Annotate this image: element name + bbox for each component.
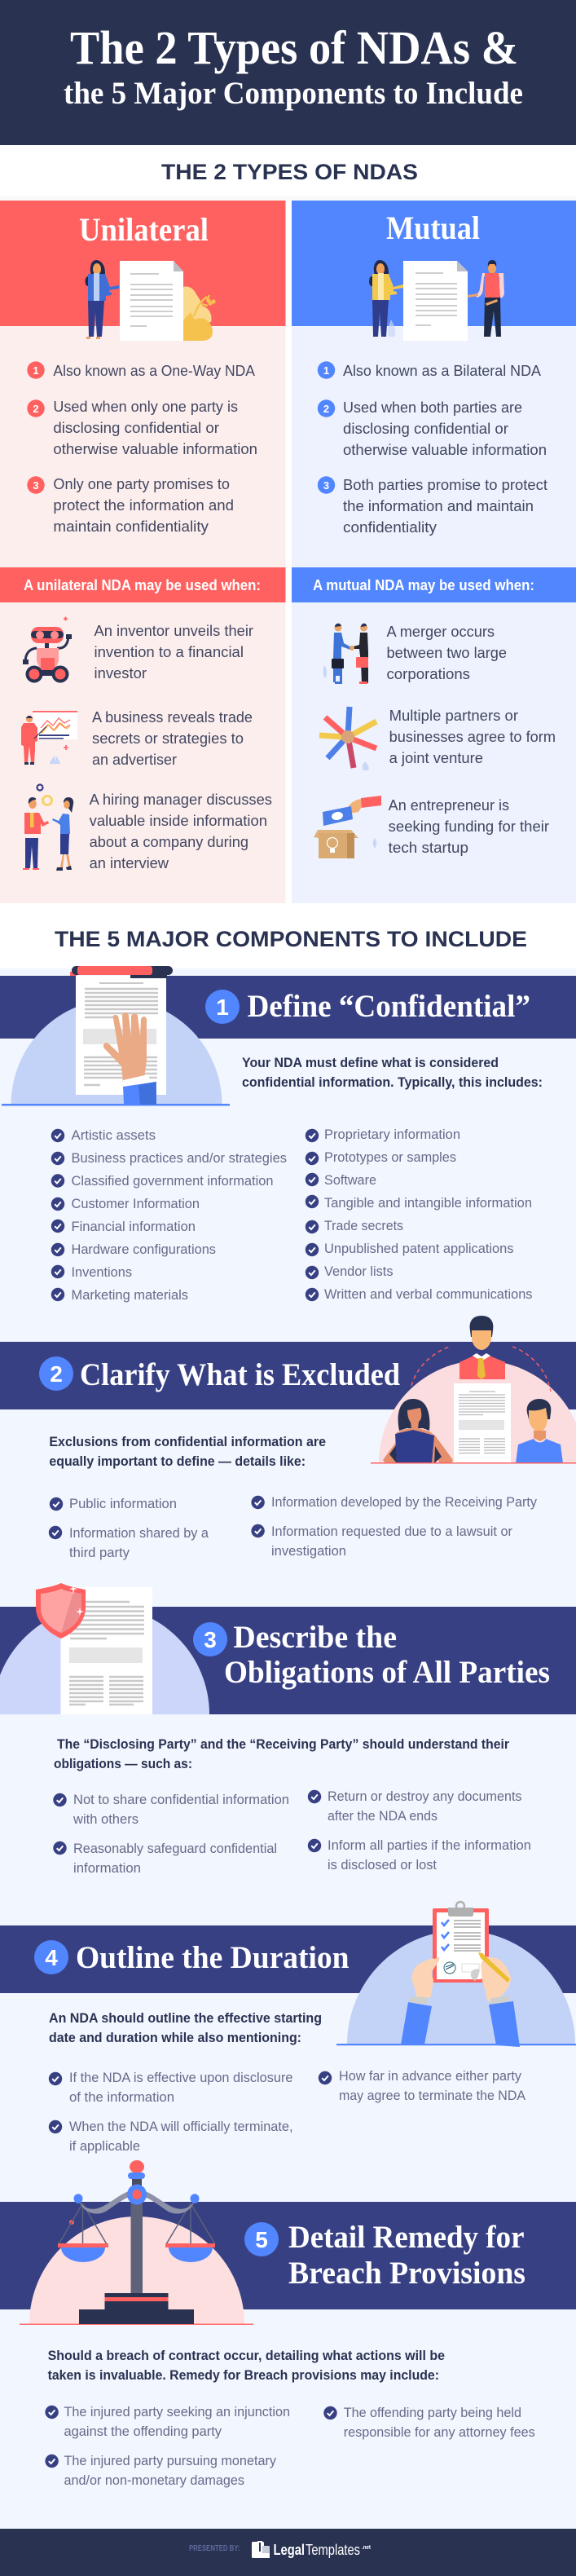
checklist: right column: after the NDA ends (328, 1809, 437, 1824)
checklist: left column: Public information (69, 1497, 177, 1511)
checklist: left column: The injured party pursuing monetary (64, 2454, 277, 2468)
checklist: right column: Unpublished patent applications (324, 1242, 513, 1256)
checklist: left column: Artistic assets (72, 1128, 156, 1143)
checklist: left column: Hardware configurations (72, 1242, 216, 1257)
intro text (54, 1737, 510, 1771)
heading: unilateral: Unilateral (79, 211, 209, 248)
bullet 1 (318, 361, 335, 379)
logo wordmark: Templates (306, 2542, 360, 2558)
logo wordmark: .net (362, 2545, 372, 2551)
checklist: right column: Tangible and intangible information (324, 1196, 532, 1211)
heading: Clarify What is Excluded (80, 1357, 400, 1392)
text: inventor: investor (95, 665, 147, 681)
banner (0, 1925, 576, 1993)
bullet 3: 3 (323, 479, 329, 492)
text: entrepreneur: tech startup (389, 840, 468, 856)
checklist: right column: Trade secrets (324, 1219, 403, 1233)
checklist: right column: The offending party being held (344, 2406, 521, 2420)
checklist: right column: Prototypes or samples (324, 1150, 456, 1165)
intro text (49, 2011, 322, 2045)
section 4: outline the duration (0, 1902, 576, 2154)
text: joint venture (389, 708, 556, 766)
intro text: An NDA should outline the effective starting (49, 2011, 322, 2026)
intro text: Should a breach of contract occur, detailing what actions will be (48, 2349, 445, 2363)
panel: mutual (292, 201, 576, 903)
checklist: left column: When the NDA will officially terminate, (69, 2119, 293, 2134)
intro text: taken is invaluable. Remedy for Breach provisions may include: (48, 2368, 439, 2383)
checklist: left column: If the NDA is effective upon disclosure (69, 2071, 293, 2085)
number badge 1: 1 (216, 995, 229, 1020)
icon: joint venture hands (319, 707, 376, 770)
item text 1: Also known as a Bilateral NDA (343, 363, 541, 379)
illustration: hand on document (2, 966, 230, 1105)
checklist: left column: Information shared by a (69, 1526, 209, 1541)
text: hiring manager: an interview (90, 855, 169, 871)
checklist: left column (45, 2405, 290, 2488)
item text 2 (53, 399, 257, 457)
title: The 2 Types of NDAs & (70, 21, 518, 74)
checklist: left column: if applicable (69, 2139, 140, 2154)
text: entrepreneur: An entrepreneur is (389, 797, 509, 814)
sub-heading bar: unilateral uses: A unilateral NDA may be used when: (24, 576, 261, 593)
icon: robot (23, 616, 72, 683)
title: the 5 Major Components to Include (64, 76, 523, 111)
number badge 4 (34, 1940, 68, 1974)
item text 3: the information and maintain (343, 498, 534, 514)
item text 2 (343, 399, 547, 458)
checklist: left column: Business practices and/or strategies (72, 1151, 287, 1166)
heading: Obligations of All Parties (224, 1655, 550, 1690)
intro text: Your NDA must define what is considered (242, 1056, 499, 1070)
footer (0, 2529, 576, 2576)
item text 2: disclosing confidential or (343, 421, 508, 437)
number badge 5 (244, 2222, 279, 2256)
text: joint venture: businesses agree to form (389, 729, 556, 745)
item text 2: otherwise valuable information (53, 441, 257, 457)
item text 3 (343, 477, 547, 536)
checklist: right column: Vendor lists (324, 1264, 393, 1279)
checklist: left column: third party (69, 1546, 130, 1560)
item text 3: confidentiality (343, 519, 437, 536)
text: merger: corporations (386, 666, 470, 682)
icon: presenter with chart (21, 711, 77, 765)
text: merger: A merger occurs (386, 624, 495, 640)
checklist: right column (323, 2406, 535, 2440)
heading: Describe the (233, 1620, 397, 1655)
text: business: secrets or strategies to (92, 730, 244, 747)
item text 3: maintain confidentiality (53, 518, 209, 535)
checklist: right column (308, 1789, 531, 1872)
sub-heading bar: mutual uses: A mutual NDA may be used when: (313, 576, 534, 593)
intro text (242, 1056, 543, 1090)
heading: Define “Confidential” (248, 989, 530, 1024)
list: unilateral features (27, 361, 257, 535)
item text 3: Both parties promise to protect (343, 477, 547, 493)
checklist: right column: Proprietary information (324, 1127, 460, 1142)
number badge 1 (205, 990, 240, 1024)
checklist: left column: against the offending party (64, 2424, 222, 2439)
illustration: hands with clipboard (336, 1902, 576, 2047)
checklist: left column: Not to share confidential information (73, 1793, 289, 1807)
icon: two people talking (23, 784, 73, 871)
banner (0, 976, 576, 1039)
bullet 2: 2 (33, 403, 39, 415)
text: joint venture: Multiple partners or (389, 708, 518, 724)
bullet 2: 2 (323, 403, 329, 415)
intro text: obligations — such as: (54, 1757, 192, 1771)
intro text (49, 1435, 326, 1469)
bullet 1 (27, 361, 45, 379)
checklist: left column: Customer Information (72, 1197, 200, 1211)
item text 2: otherwise valuable information (343, 442, 547, 458)
section 2: clarify what is excluded (0, 1316, 576, 1560)
text: merger: between two large (386, 645, 507, 661)
section 5: detail remedy (0, 2160, 576, 2488)
icon: money and idea box (314, 796, 381, 858)
checklist: right column: Written and verbal communications (324, 1287, 533, 1302)
item text 2: Used when both parties are (343, 399, 522, 416)
banner (0, 2202, 576, 2309)
checklist: right column (251, 1495, 538, 1559)
illustration: scales of justice (20, 2160, 253, 2325)
header banner (0, 0, 576, 145)
text: hiring manager: about a company during (90, 834, 248, 850)
number badge 4: 4 (45, 1945, 58, 1970)
number badge 2 (39, 1356, 73, 1391)
bullet 3: 3 (33, 479, 39, 492)
bullet 3 (27, 476, 45, 494)
bullet 1: 1 (323, 364, 329, 377)
heading: mutual: Mutual (386, 210, 480, 246)
checklist: left column: Marketing materials (72, 1288, 188, 1303)
text: entrepreneur (389, 797, 549, 856)
item text 2: Used when only one party is (53, 399, 238, 415)
heading (288, 2220, 525, 2291)
checklist: right column: Return or destroy any documents (328, 1789, 521, 1804)
checklist: left column: Inventions (72, 1265, 132, 1280)
intro text: date and duration while also mentioning: (49, 2031, 301, 2045)
icon: plant behind document (182, 286, 216, 341)
text: business (92, 709, 253, 768)
checklist: right column: responsible for any attorney fees (344, 2425, 535, 2440)
text: business: A business reveals trade (92, 709, 253, 726)
heading: Detail Remedy for (288, 2220, 525, 2255)
item text 3: Only one party promises to (53, 476, 230, 492)
bullet 2 (27, 399, 45, 417)
checklist: left column: Financial information (72, 1220, 196, 1234)
icon: woman with yellow jacket (369, 260, 403, 337)
heading: the 5 major components: THE 5 MAJOR COMPONENTS TO INCLUDE (55, 927, 527, 951)
checklist: left column: and/or non-monetary damages (64, 2473, 244, 2488)
checklist: right column: Information developed by the Receiving Party (271, 1495, 538, 1510)
checklist: left column: of the information (69, 2090, 174, 2105)
item text 2: disclosing confidential or (53, 420, 219, 436)
intro text: Exclusions from confidential information are (49, 1435, 326, 1449)
item text 3: protect the information and (53, 497, 234, 514)
illustration: three people and contract (371, 1316, 576, 1464)
logo mark (252, 2541, 270, 2558)
checklist: left column (51, 1128, 287, 1303)
text: joint venture: a joint venture (389, 750, 483, 766)
intro text: confidential information. Typically, this includes: (242, 1075, 543, 1090)
bullet 1: 1 (33, 364, 39, 377)
text: merger (386, 624, 507, 682)
checklist: left column: Reasonably safeguard confidential (73, 1842, 277, 1856)
text: hiring manager (90, 792, 272, 871)
text: business: an advertiser (92, 752, 177, 768)
text: entrepreneur: seeking funding for their (389, 818, 549, 835)
text: hiring manager: valuable inside information (90, 813, 267, 829)
bullet 2 (318, 399, 335, 417)
checklist: right column (319, 2069, 525, 2103)
section 1: define confidential (0, 966, 576, 1303)
checklist: right column: Software (324, 1173, 376, 1188)
number badge 3 (193, 1622, 227, 1656)
heading (224, 1620, 550, 1690)
checklist: right column (306, 1127, 533, 1302)
item text 3 (53, 476, 234, 535)
text: hiring manager: A hiring manager discusses (90, 792, 272, 808)
number badge 5: 5 (255, 2227, 268, 2252)
heading: Outline the Duration (76, 1940, 350, 1975)
text: inventor: invention to a financial (95, 644, 244, 660)
icon: document (120, 261, 183, 341)
list: mutual features (318, 361, 547, 536)
logo wordmark (274, 2542, 372, 2558)
checklist: left column: Classified government information (72, 1174, 274, 1189)
icon: woman with blue jacket (85, 260, 119, 339)
checklist: right column: is disclosed or lost (328, 1858, 437, 1872)
sub-heading bar: unilateral uses (0, 567, 285, 602)
banner (0, 1607, 576, 1714)
number badge 3: 3 (204, 1627, 217, 1652)
bullet 3 (318, 476, 335, 494)
checklist: right column: investigation (271, 1544, 346, 1559)
illustration: shield and document (0, 1583, 209, 1714)
number badge 2: 2 (50, 1361, 63, 1387)
checklist: left column: with others (73, 1812, 139, 1827)
checklist: left column: The injured party seeking an injunction (64, 2405, 290, 2419)
icon: document (403, 261, 468, 341)
intro text (48, 2349, 445, 2383)
panel: unilateral (0, 201, 285, 903)
intro text: The “Disclosing Party” and the “Receiving Party” should understand their (57, 1737, 510, 1752)
item text 1: Also known as a One-Way NDA (53, 363, 255, 379)
checklist: left column: information (73, 1861, 141, 1876)
checklist: right column: may agree to terminate the NDA (339, 2089, 525, 2103)
presented by label: PRESENTED BY: (189, 2544, 240, 2553)
sub-heading bar: mutual uses (292, 567, 576, 602)
checklist: right column: Information requested due to a lawsuit or (271, 1524, 512, 1539)
text: inventor: An inventor unveils their (95, 623, 253, 639)
section 3: describe the obligations (0, 1583, 576, 1876)
checklist: left column (49, 2071, 293, 2154)
checklist: right column: How far in advance either party (339, 2069, 522, 2084)
icon: man with red vest (468, 260, 504, 337)
checklist: left column (53, 1793, 289, 1876)
text: inventor (95, 623, 253, 681)
banner (0, 1342, 576, 1409)
intro text: equally important to define — details like: (49, 1454, 306, 1469)
icon: businessmen handshake (323, 624, 368, 684)
title (64, 21, 523, 111)
heading: the 2 types of NDAs: THE 2 TYPES OF NDAS (161, 160, 418, 184)
logo wordmark: Legal (274, 2542, 305, 2558)
checklist: left column (49, 1497, 209, 1560)
heading: Breach Provisions (288, 2256, 525, 2291)
checklist: right column: Inform all parties if the information (328, 1838, 531, 1853)
